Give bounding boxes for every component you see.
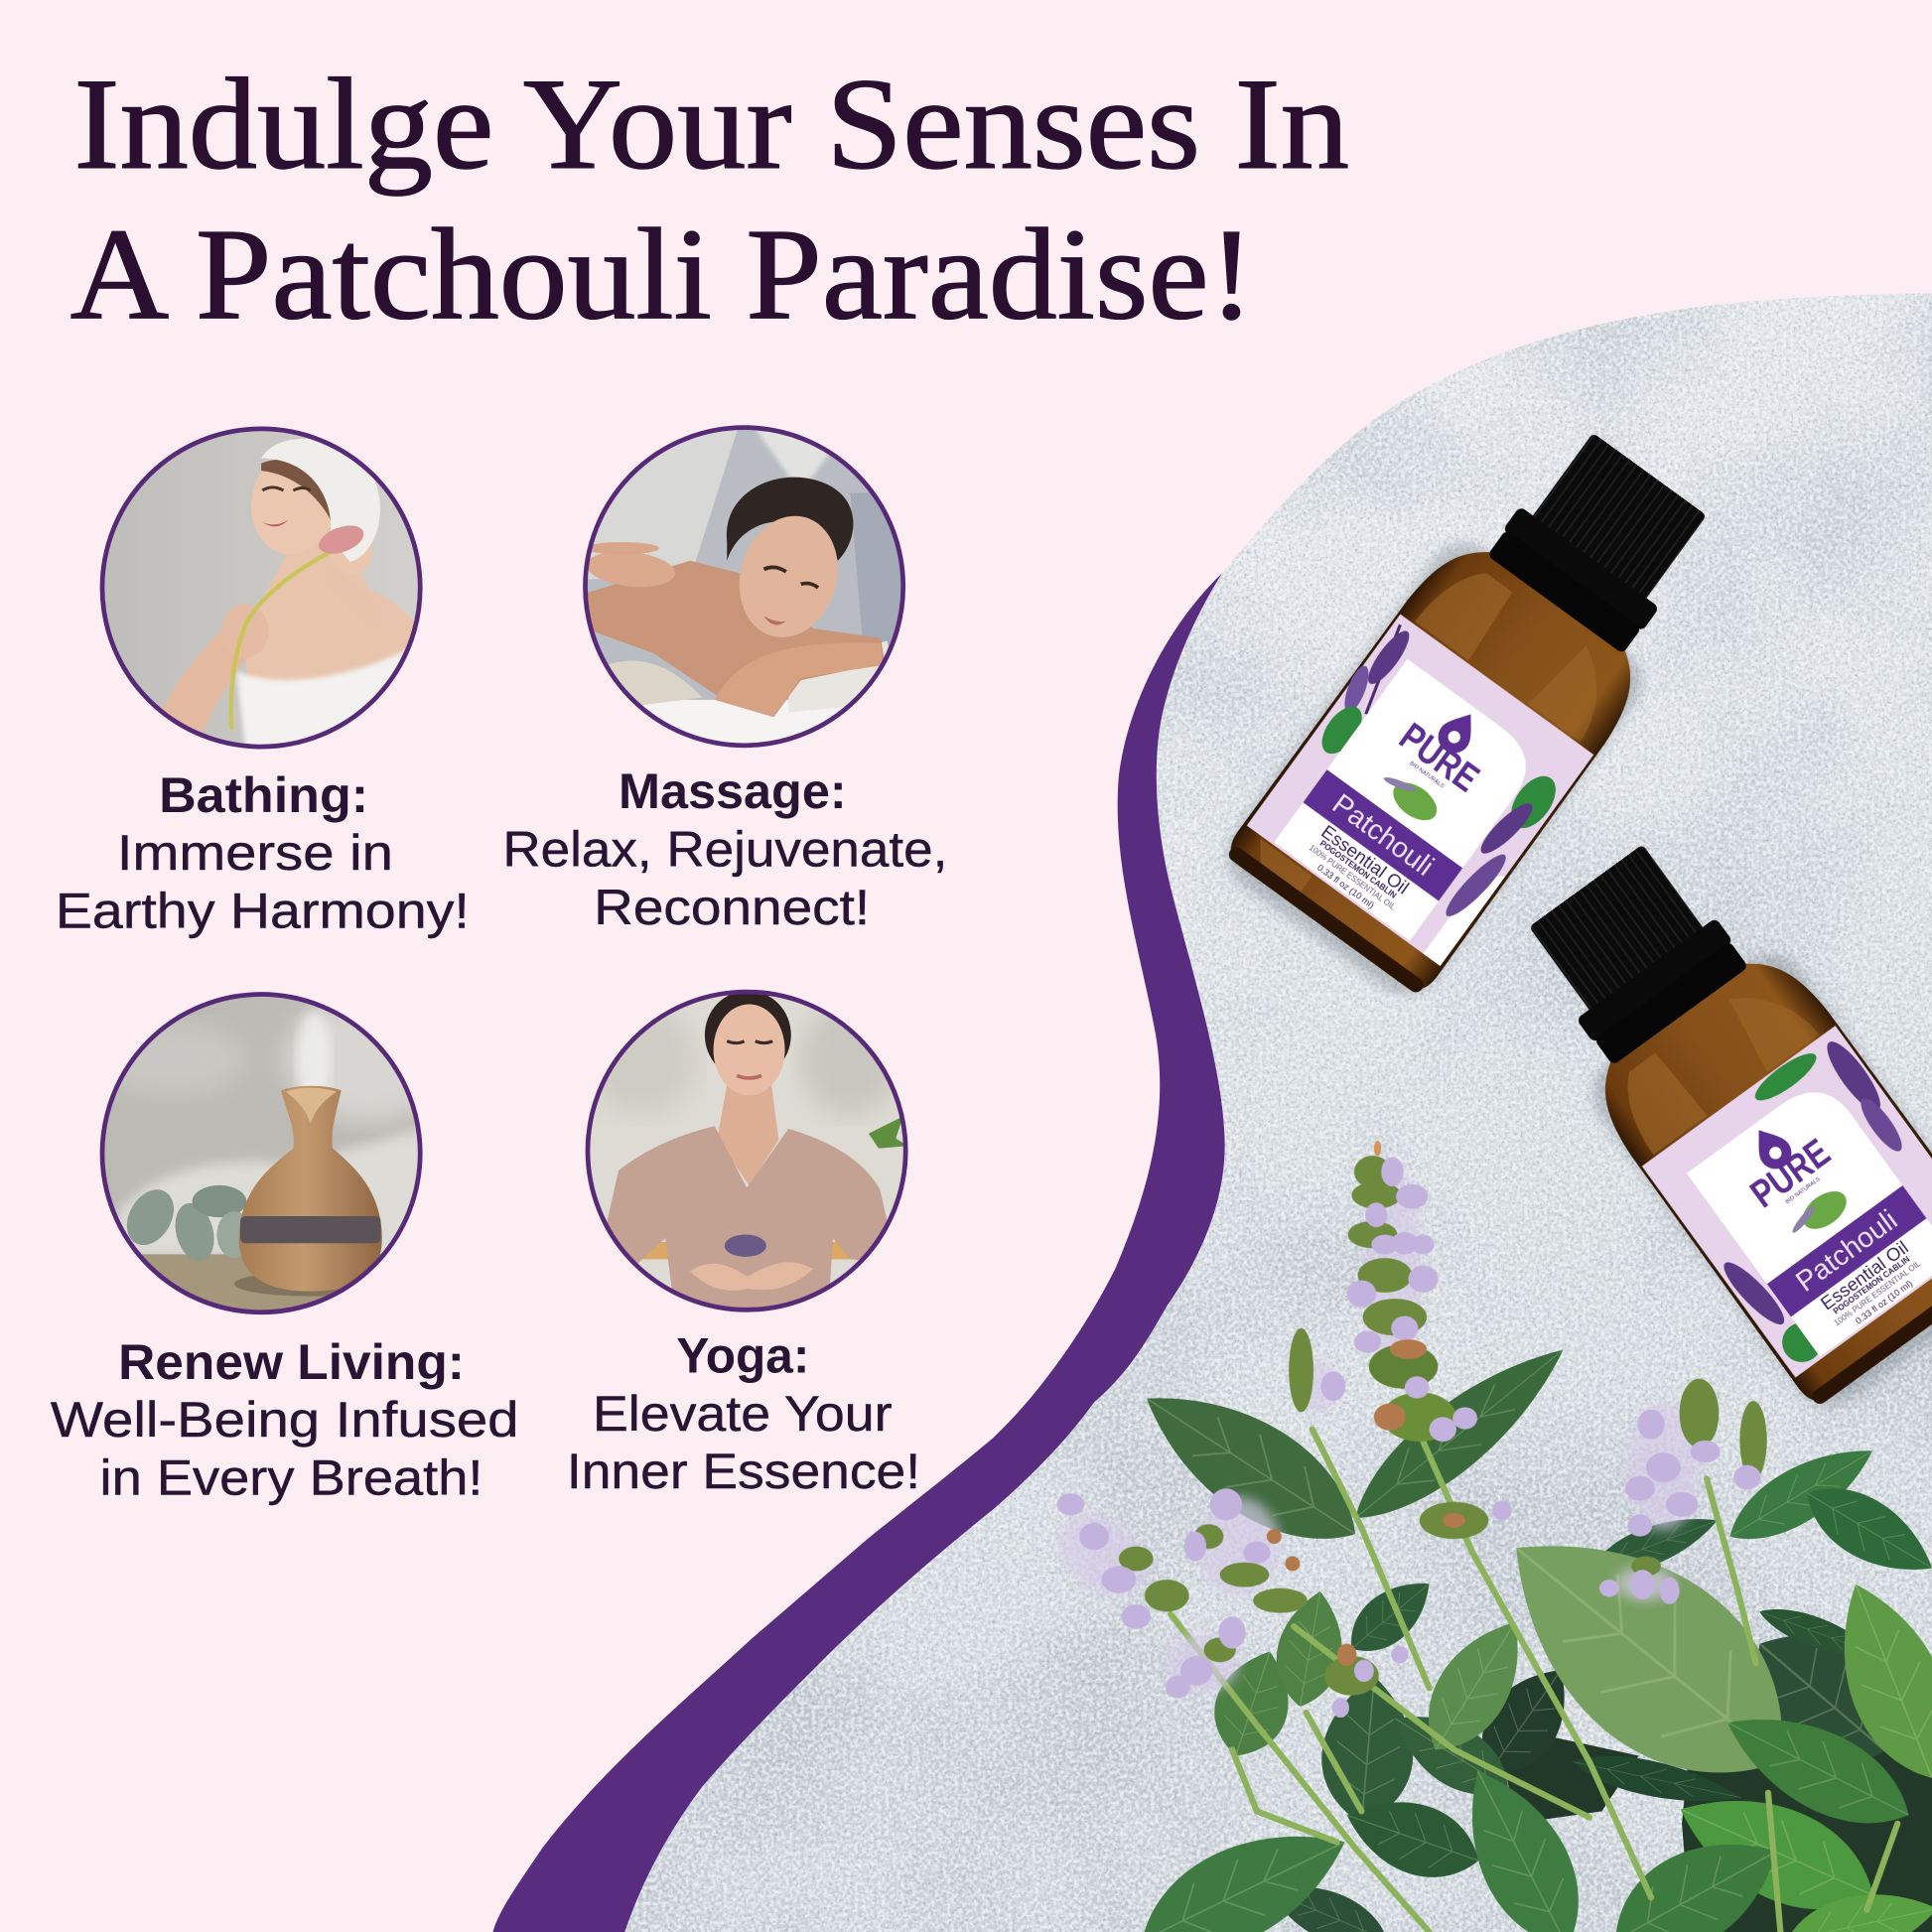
patchouli plant	[1042, 1141, 1932, 1932]
bottle: patchouli upper	[1220, 400, 1749, 998]
panel: bathing	[56, 425, 470, 939]
caption: bathing: Earthy Harmony!	[56, 884, 470, 939]
logo wordmark: PURE	[1392, 716, 1486, 800]
logo drop	[1432, 705, 1484, 759]
leaves	[1122, 1324, 1932, 1932]
purple wave band	[492, 573, 1225, 1932]
label: Patchouli	[1790, 1204, 1903, 1299]
leaf sprig icon	[1374, 766, 1444, 828]
title: A Patchouli Paradise!	[70, 203, 1254, 346]
amber glass body	[1576, 936, 1932, 1410]
label: POGOSTEMON CABLIN	[1318, 839, 1398, 900]
caption: renew living: Renew Living:	[118, 1334, 465, 1390]
photo: woman bathing	[104, 431, 418, 745]
label: BIO NATURALS	[1408, 760, 1445, 789]
dark foliage mass	[1497, 1639, 1932, 1932]
stems	[1171, 1430, 1897, 1932]
cap	[1516, 835, 1750, 1067]
label	[1641, 1026, 1932, 1378]
bottle: patchouli lower	[1486, 813, 1932, 1410]
caption: yoga	[567, 1328, 920, 1499]
label botanical art	[1268, 618, 1587, 929]
caption: bathing	[56, 767, 470, 939]
caption: bathing: Immerse in	[117, 825, 393, 881]
label: BIO NATURALS	[1785, 1176, 1822, 1205]
green flower calyxes	[1119, 1156, 1767, 1696]
label: 0.33 fl oz (10 ml)	[1315, 862, 1376, 910]
label: Essential Oil	[1817, 1237, 1912, 1313]
lilac blossoms	[1057, 1157, 1760, 1718]
dried brown blossoms	[1267, 1141, 1465, 1666]
photo: aroma diffuser	[104, 997, 418, 1311]
caption: massage: Relax, Rejuvenate,	[502, 821, 947, 877]
panel: yoga	[567, 988, 920, 1499]
title	[70, 53, 1349, 346]
caption: renew living: Well-Being Infused	[51, 1392, 518, 1448]
photo: meditating woman	[584, 988, 910, 1315]
label: Essential Oil	[1317, 821, 1413, 898]
caption: renew living	[51, 1334, 518, 1505]
caption: yoga: Elevate Your	[593, 1386, 893, 1442]
label: 0.33 fl oz (10 ml)	[1854, 1278, 1914, 1326]
logo drop	[1745, 1121, 1798, 1175]
photo ring	[586, 428, 903, 746]
panel: stone surface	[625, 294, 1932, 1932]
leaf sprig icon	[1784, 1183, 1854, 1246]
panel: massage	[502, 424, 947, 935]
photo ring	[588, 992, 905, 1310]
caption: massage: Massage:	[619, 763, 847, 819]
label: 100% PURE ESSENTIAL OIL	[1308, 843, 1398, 912]
logo wordmark: PURE	[1743, 1131, 1838, 1216]
cap	[1485, 423, 1720, 655]
caption: bathing: Bathing:	[159, 767, 368, 823]
label	[1242, 611, 1593, 966]
photo ring	[102, 995, 420, 1312]
bottle shadows	[1213, 529, 1932, 1420]
lilac flower glow	[1042, 1165, 1701, 1693]
caption: massage: Reconnect!	[594, 880, 870, 935]
caption: renew living: in Every Breath!	[100, 1449, 483, 1505]
caption: massage	[502, 763, 947, 935]
panel: renew living	[51, 991, 518, 1505]
label: 100% PURE ESSENTIAL OIL	[1833, 1259, 1923, 1327]
title: Indulge Your Senses In	[73, 53, 1349, 197]
caption: yoga: Yoga:	[676, 1328, 809, 1384]
photo ring	[102, 429, 420, 747]
photo: massage	[588, 430, 901, 717]
caption: yoga: Inner Essence!	[567, 1444, 920, 1499]
amber glass body	[1222, 524, 1660, 998]
label: POGOSTEMON CABLIN	[1832, 1255, 1912, 1316]
label botanical art	[1642, 1029, 1932, 1374]
label: Patchouli	[1326, 788, 1440, 883]
